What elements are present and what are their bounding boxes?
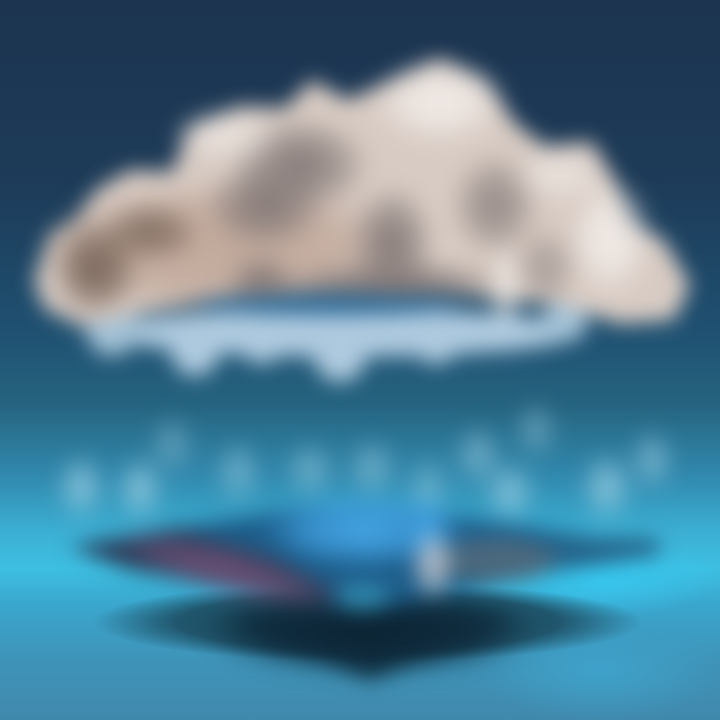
cloud highlights [169,58,654,329]
raindrops [55,398,676,526]
device: tablet [70,492,662,623]
cloud base: blue band [195,295,465,315]
device spine highlight upper [408,496,448,568]
device bottom glow [337,584,389,610]
cloud shading: darker folds [49,115,579,320]
device spine highlight lower [411,529,455,601]
cloud peach tone lower left [35,178,415,318]
shadow tip [235,615,510,680]
device left panel [70,528,340,606]
shadow beneath device [200,586,540,680]
cloud silhouette [34,58,690,326]
device bright center [260,492,470,568]
device right panel dark [455,536,662,590]
cloud body [34,58,690,329]
device body [75,508,660,606]
shadow core [200,586,540,674]
device purple strip [108,517,342,623]
cloud underside: pale blue wavy base [86,298,587,382]
device right brown patch [435,538,555,582]
